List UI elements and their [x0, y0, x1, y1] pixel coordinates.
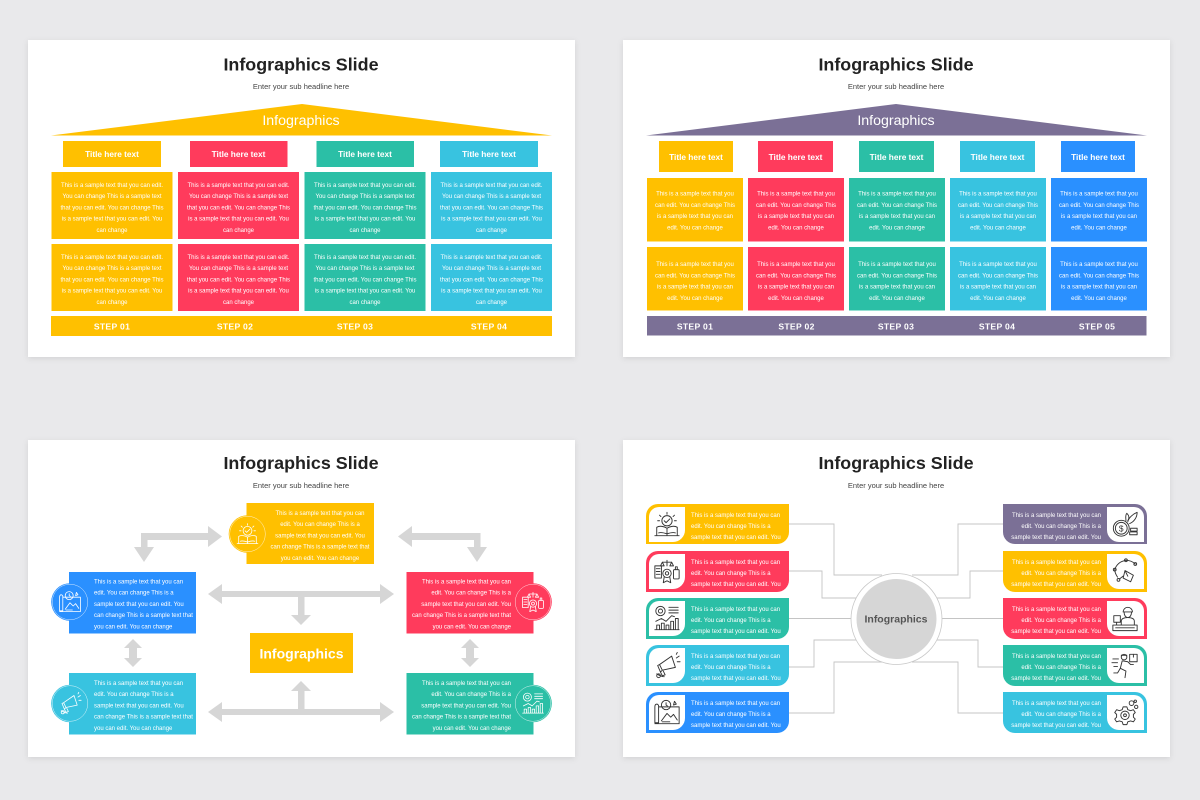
roof banner: [51, 104, 552, 136]
text box row 1 col 1: can change: [96, 228, 128, 234]
text box row 2 col 2: can change: [223, 300, 255, 306]
title box 4: Title here text: [462, 149, 516, 159]
text box row 1 col 1: You can change This is a sample text: [62, 194, 162, 200]
text box row 1 col 1: is a sample text that you can: [657, 214, 733, 220]
node: right red: This is a sample text that you can: [422, 580, 511, 586]
title box 2: Title here text: [212, 149, 266, 159]
node: right red: edit. You can change This is a: [431, 591, 512, 597]
arrow: top right elbow: [398, 526, 487, 562]
icon: teal node: [514, 685, 552, 722]
text box row 1 col 2: that you can edit. You can change This: [187, 205, 290, 211]
subtitle: Enter your sub headline here: [253, 481, 349, 490]
step bar: STEP 05: [1079, 322, 1115, 332]
title box 4: Title here text: [971, 152, 1025, 162]
right item 1: [1003, 504, 1147, 544]
text box row 1 col 5: is a sample text that you can: [1061, 214, 1137, 220]
left item 3: This is a sample text that you can: [691, 607, 780, 613]
text box row 1 col 3: This is a sample text that you: [858, 192, 936, 198]
text box row 2 col 2: [748, 247, 844, 310]
right item 2: This is a sample text that you can: [1012, 560, 1101, 566]
text box row 2 col 1: edit. You can change: [667, 296, 724, 302]
text box row 2 col 2: can edit. You can change This: [756, 273, 836, 279]
title box 5: [1061, 141, 1135, 172]
text box row 2 col 1: can edit. You can change This: [655, 273, 735, 279]
text box row 2 col 4: that you can edit. You can change This: [440, 277, 543, 283]
text box row 2 col 3: can edit. You can change This: [857, 273, 937, 279]
right item 4: This is a sample text that you can: [1012, 654, 1101, 660]
panel: hub and spoke diagram: [623, 440, 1170, 757]
text box row 1 col 4: is a sample text that you can: [960, 214, 1036, 220]
title box 1: [63, 141, 161, 167]
node: left cyan: you can edit. You can change: [94, 726, 173, 732]
text box row 1 col 2: is a sample text that you can edit. You: [188, 217, 289, 223]
step bar: STEP 01: [94, 322, 130, 332]
step bar: [647, 316, 1146, 336]
left item 1: This is a sample text that you can: [691, 513, 780, 519]
text box row 1 col 3: [849, 178, 945, 242]
right item 3: sample text that you can edit. You: [1011, 629, 1101, 635]
left item 4: edit. You can change This is a: [691, 665, 771, 671]
text box row 2 col 3: that you can edit. You can change This: [314, 277, 416, 283]
left item 4: [646, 645, 789, 686]
text box row 1 col 5: edit. You can change: [1071, 225, 1128, 231]
text box row 2 col 4: This is a sample text that you can edit.: [440, 255, 543, 261]
text box row 2 col 4: [950, 247, 1046, 310]
text box row 1 col 3: is a sample text that you can: [859, 214, 935, 220]
text box row 1 col 5: [1051, 178, 1147, 242]
title box 2: [758, 141, 833, 172]
node: right red: you can edit. You can change: [433, 624, 512, 630]
right item 2: sample text that you can edit. You: [1011, 582, 1101, 588]
text box row 1 col 1: This is a sample text that you can edit.: [61, 183, 163, 189]
title: Infographics Slide: [818, 54, 974, 74]
text box row 1 col 4: This is a sample text that you: [959, 192, 1037, 198]
text box row 2 col 2: that you can edit. You can change This: [187, 277, 290, 283]
step bar: STEP 02: [778, 322, 815, 332]
left item 3: [646, 598, 789, 639]
title box 3: Title here text: [870, 152, 924, 162]
text box row 1 col 4: edit. You can change: [970, 225, 1027, 231]
icon: red node: [514, 583, 552, 621]
arrow: right vertical double: [461, 639, 479, 667]
node: left blue: can change This is a sample text that: [94, 613, 193, 619]
text box row 2 col 2: This is a sample text that you can edit.: [187, 255, 290, 261]
node: left cyan: [69, 673, 196, 734]
node: left blue: [69, 572, 196, 634]
right item 5: [1003, 692, 1147, 733]
subtitle: Enter your sub headline here: [848, 481, 944, 490]
panel: four-step table: [28, 40, 575, 357]
text box row 2 col 3: This is a sample text that you: [858, 262, 936, 268]
text box row 2 col 1: that you can edit. You can change This: [61, 277, 163, 283]
left item 2: This is a sample text that you can: [691, 560, 780, 566]
text box row 1 col 2: This is a sample text that you: [757, 192, 835, 198]
panel: five-step table: [623, 40, 1170, 357]
left item 3: sample text that you can edit. You: [691, 629, 781, 635]
text box row 2 col 1: [647, 247, 743, 310]
icon: cyan node: [51, 685, 89, 722]
text box row 1 col 2: is a sample text that you can: [758, 214, 834, 220]
connector lines: [789, 524, 1003, 713]
center box: [250, 633, 353, 673]
text box row 2 col 4: is a sample text that you can: [960, 285, 1036, 291]
text box row 2 col 4: You can change This is a sample text: [442, 266, 541, 272]
node: right red: [406, 572, 534, 634]
text box row 2 col 5: is a sample text that you can: [1061, 285, 1137, 291]
text box row 1 col 4: You can change This is a sample text: [442, 194, 541, 200]
text box row 2 col 5: This is a sample text that you: [1060, 262, 1138, 268]
title box 2: [190, 141, 288, 167]
text box row 2 col 1: This is a sample text that you can edit.: [61, 255, 163, 261]
text box row 1 col 1: edit. You can change: [667, 225, 724, 231]
node: top yellow: edit. You can change This is a: [280, 522, 360, 528]
left item 5: sample text that you can edit. You: [691, 723, 781, 729]
text box row 2 col 2: edit. You can change: [768, 296, 825, 302]
text box row 1 col 3: You can change This is a sample text: [315, 194, 415, 200]
node: right red: sample text that you can edit. You: [421, 602, 511, 608]
text box row 1 col 2: can change: [223, 228, 255, 234]
text box row 2 col 2: This is a sample text that you: [757, 262, 835, 268]
step bar: STEP 03: [878, 322, 914, 332]
subtitle: Enter your sub headline here: [848, 82, 944, 91]
step bar: STEP 03: [337, 322, 373, 332]
icon: yellow node: [229, 515, 266, 553]
left item 5: [646, 692, 789, 733]
text box row 1 col 4: can edit. You can change This: [958, 203, 1038, 209]
title box 5: Title here text: [1071, 152, 1125, 162]
node: right red: can change This is a sample text that: [412, 613, 511, 619]
text box row 2 col 2: You can change This is a sample text: [189, 266, 288, 272]
text box row 1 col 3: that you can edit. You can change This: [314, 205, 416, 211]
text box row 2 col 3: This is a sample text that you can edit.: [314, 255, 416, 261]
node: top yellow: This is a sample text that you can: [275, 511, 365, 517]
text box row 1 col 5: can edit. You can change This: [1059, 203, 1139, 209]
node: top yellow: you can edit. You can change: [281, 556, 360, 562]
node: left cyan: can change This is a sample text that: [94, 715, 193, 721]
step bar: STEP 04: [979, 322, 1015, 332]
text box row 2 col 5: [1051, 247, 1147, 310]
text box row 2 col 4: can change: [476, 300, 508, 306]
text box row 2 col 4: edit. You can change: [970, 296, 1027, 302]
text box row 1 col 5: This is a sample text that you: [1060, 192, 1138, 198]
text box row 1 col 4: [431, 172, 552, 239]
text box row 2 col 3: is a sample text that you can: [859, 285, 935, 291]
text box row 1 col 3: This is a sample text that you can edit.: [314, 183, 416, 189]
title box 3: [859, 141, 934, 172]
text box row 1 col 1: can edit. You can change This: [655, 203, 735, 209]
text box row 2 col 4: [431, 244, 552, 311]
text box row 1 col 4: This is a sample text that you can edit.: [440, 183, 543, 189]
title: Infographics Slide: [223, 54, 379, 74]
text box row 1 col 2: You can change This is a sample text: [189, 194, 288, 200]
text box row 2 col 2: is a sample text that you can: [758, 285, 834, 291]
step bar: STEP 04: [471, 322, 507, 332]
subtitle: Enter your sub headline here: [253, 82, 349, 91]
node: top yellow: can change This is a sample text that: [271, 545, 370, 551]
node: right teal: you can edit. You can change: [433, 726, 512, 732]
text box row 2 col 1: can change: [96, 300, 128, 306]
text box row 1 col 1: [52, 172, 172, 239]
title box 3: Title here text: [338, 149, 392, 159]
left item 5: edit. You can change This is a: [691, 712, 771, 718]
node: right teal: [406, 673, 534, 734]
text box row 1 col 2: edit. You can change: [768, 225, 825, 231]
step bar: STEP 02: [217, 322, 253, 332]
text box row 1 col 1: This is a sample text that you: [656, 192, 734, 198]
text box row 2 col 1: This is a sample text that you: [656, 262, 734, 268]
right item 2: edit. You can change This is a: [1021, 571, 1102, 577]
text box row 1 col 2: can edit. You can change This: [756, 203, 836, 209]
text box row 2 col 4: is a sample text that you can edit. You: [441, 289, 542, 295]
title box 1: [659, 141, 733, 172]
node: top yellow: [246, 503, 374, 564]
left item 2: edit. You can change This is a: [691, 571, 771, 577]
left item 1: [646, 504, 789, 544]
text box row 2 col 4: This is a sample text that you: [959, 262, 1037, 268]
text box row 1 col 3: [304, 172, 426, 239]
title: Infographics Slide: [223, 453, 379, 473]
right item 4: [1003, 645, 1147, 686]
title box 4: [440, 141, 538, 167]
left item 1: edit. You can change This is a: [691, 524, 771, 530]
node: left cyan: edit. You can change This is a: [94, 692, 174, 698]
roof banner: [646, 104, 1147, 136]
text box row 1 col 3: can change: [349, 228, 381, 234]
text box row 2 col 3: edit. You can change: [869, 296, 926, 302]
arrow: left vertical double: [124, 639, 142, 667]
node: left blue: you can edit. You can change: [94, 624, 173, 630]
text box row 1 col 1: [647, 178, 743, 242]
text box row 2 col 1: is a sample text that you can: [657, 285, 733, 291]
text box row 1 col 3: edit. You can change: [869, 225, 926, 231]
text box row 2 col 1: You can change This is a sample text: [62, 266, 162, 272]
text box row 2 col 2: [178, 244, 299, 311]
text box row 1 col 4: can change: [476, 228, 508, 234]
text box row 2 col 3: [304, 244, 426, 311]
roof banner: Infographics: [262, 113, 340, 129]
node: left blue: sample text that you can edit. You: [94, 602, 184, 608]
text box row 2 col 3: You can change This is a sample text: [315, 266, 415, 272]
text box row 2 col 4: can edit. You can change This: [958, 273, 1038, 279]
step bar: STEP 01: [677, 322, 713, 332]
text box row 1 col 3: is a sample text that you can edit. You: [315, 217, 415, 223]
text box row 1 col 4: that you can edit. You can change This: [440, 205, 543, 211]
node: right teal: edit. You can change This is a: [431, 692, 512, 698]
arrow: middle t-shape: [208, 584, 394, 625]
text box row 2 col 3: is a sample text that you can edit. You: [315, 289, 415, 295]
text box row 1 col 4: [950, 178, 1046, 242]
text box row 2 col 5: edit. You can change: [1071, 296, 1128, 302]
text box row 1 col 2: This is a sample text that you can edit.: [187, 183, 290, 189]
right item 2: [1003, 551, 1147, 592]
panel: arrow flow diagram: [28, 440, 575, 757]
left item 2: [646, 551, 789, 592]
right item 3: edit. You can change This is a: [1021, 618, 1102, 624]
right item 1: edit. You can change This is a: [1021, 524, 1102, 530]
node: right teal: This is a sample text that you can: [422, 681, 511, 687]
node: left blue: This is a sample text that you can: [94, 580, 183, 586]
node: left cyan: sample text that you can edit. You: [94, 703, 184, 709]
left item 2: sample text that you can edit. You: [691, 582, 781, 588]
node: left blue: edit. You can change This is a: [94, 591, 174, 597]
text box row 2 col 3: [849, 247, 945, 310]
right item 1: sample text that you can edit. You: [1011, 535, 1101, 541]
right item 4: edit. You can change This is a: [1021, 665, 1102, 671]
left item 4: sample text that you can edit. You: [691, 676, 781, 682]
text box row 2 col 1: [52, 244, 172, 311]
title box 3: [316, 141, 414, 167]
text box row 2 col 3: can change: [349, 300, 381, 306]
icon: blue node: [51, 583, 89, 621]
right item 4: sample text that you can edit. You: [1011, 676, 1101, 682]
left item 3: edit. You can change This is a: [691, 618, 771, 624]
center hub: Infographics: [864, 614, 928, 626]
text box row 1 col 3: can edit. You can change This: [857, 203, 937, 209]
roof banner: Infographics: [857, 113, 935, 129]
text box row 1 col 1: is a sample text that you can edit. You: [62, 217, 162, 223]
title box 2: Title here text: [769, 152, 823, 162]
right item 5: edit. You can change This is a: [1021, 712, 1102, 718]
right item 5: sample text that you can edit. You: [1011, 723, 1101, 729]
node: top yellow: sample text that you can edit. You: [275, 533, 365, 539]
step bar: [51, 316, 552, 336]
arrow: bottom t-shape: [208, 681, 394, 722]
right item 1: This is a sample text that you can: [1012, 513, 1101, 519]
node: right teal: sample text that you can edit. You: [421, 703, 511, 709]
text box row 1 col 4: is a sample text that you can edit. You: [441, 217, 542, 223]
node: right teal: can change This is a sample text that: [412, 715, 511, 721]
text box row 2 col 2: is a sample text that you can edit. You: [188, 289, 289, 295]
left item 5: This is a sample text that you can: [691, 701, 780, 707]
right item 3: [1003, 598, 1147, 639]
text box row 1 col 2: [178, 172, 299, 239]
text box row 1 col 1: that you can edit. You can change This: [61, 205, 163, 211]
arrow: top left elbow: [134, 526, 222, 562]
text box row 1 col 2: [748, 178, 844, 242]
text box row 2 col 1: is a sample text that you can edit. You: [62, 289, 162, 295]
right item 3: This is a sample text that you can: [1012, 607, 1101, 613]
left item 1: sample text that you can edit. You: [691, 535, 781, 541]
right item 5: This is a sample text that you can: [1012, 701, 1101, 707]
title: Infographics Slide: [818, 453, 974, 473]
left item 4: This is a sample text that you can: [691, 654, 780, 660]
node: left cyan: This is a sample text that you can: [94, 681, 183, 687]
title box 1: Title here text: [85, 149, 139, 159]
center box: Infographics: [259, 646, 344, 662]
center hub: [851, 574, 942, 664]
title box 4: [960, 141, 1035, 172]
title box 1: Title here text: [669, 152, 723, 162]
text box row 2 col 5: can edit. You can change This: [1059, 273, 1139, 279]
